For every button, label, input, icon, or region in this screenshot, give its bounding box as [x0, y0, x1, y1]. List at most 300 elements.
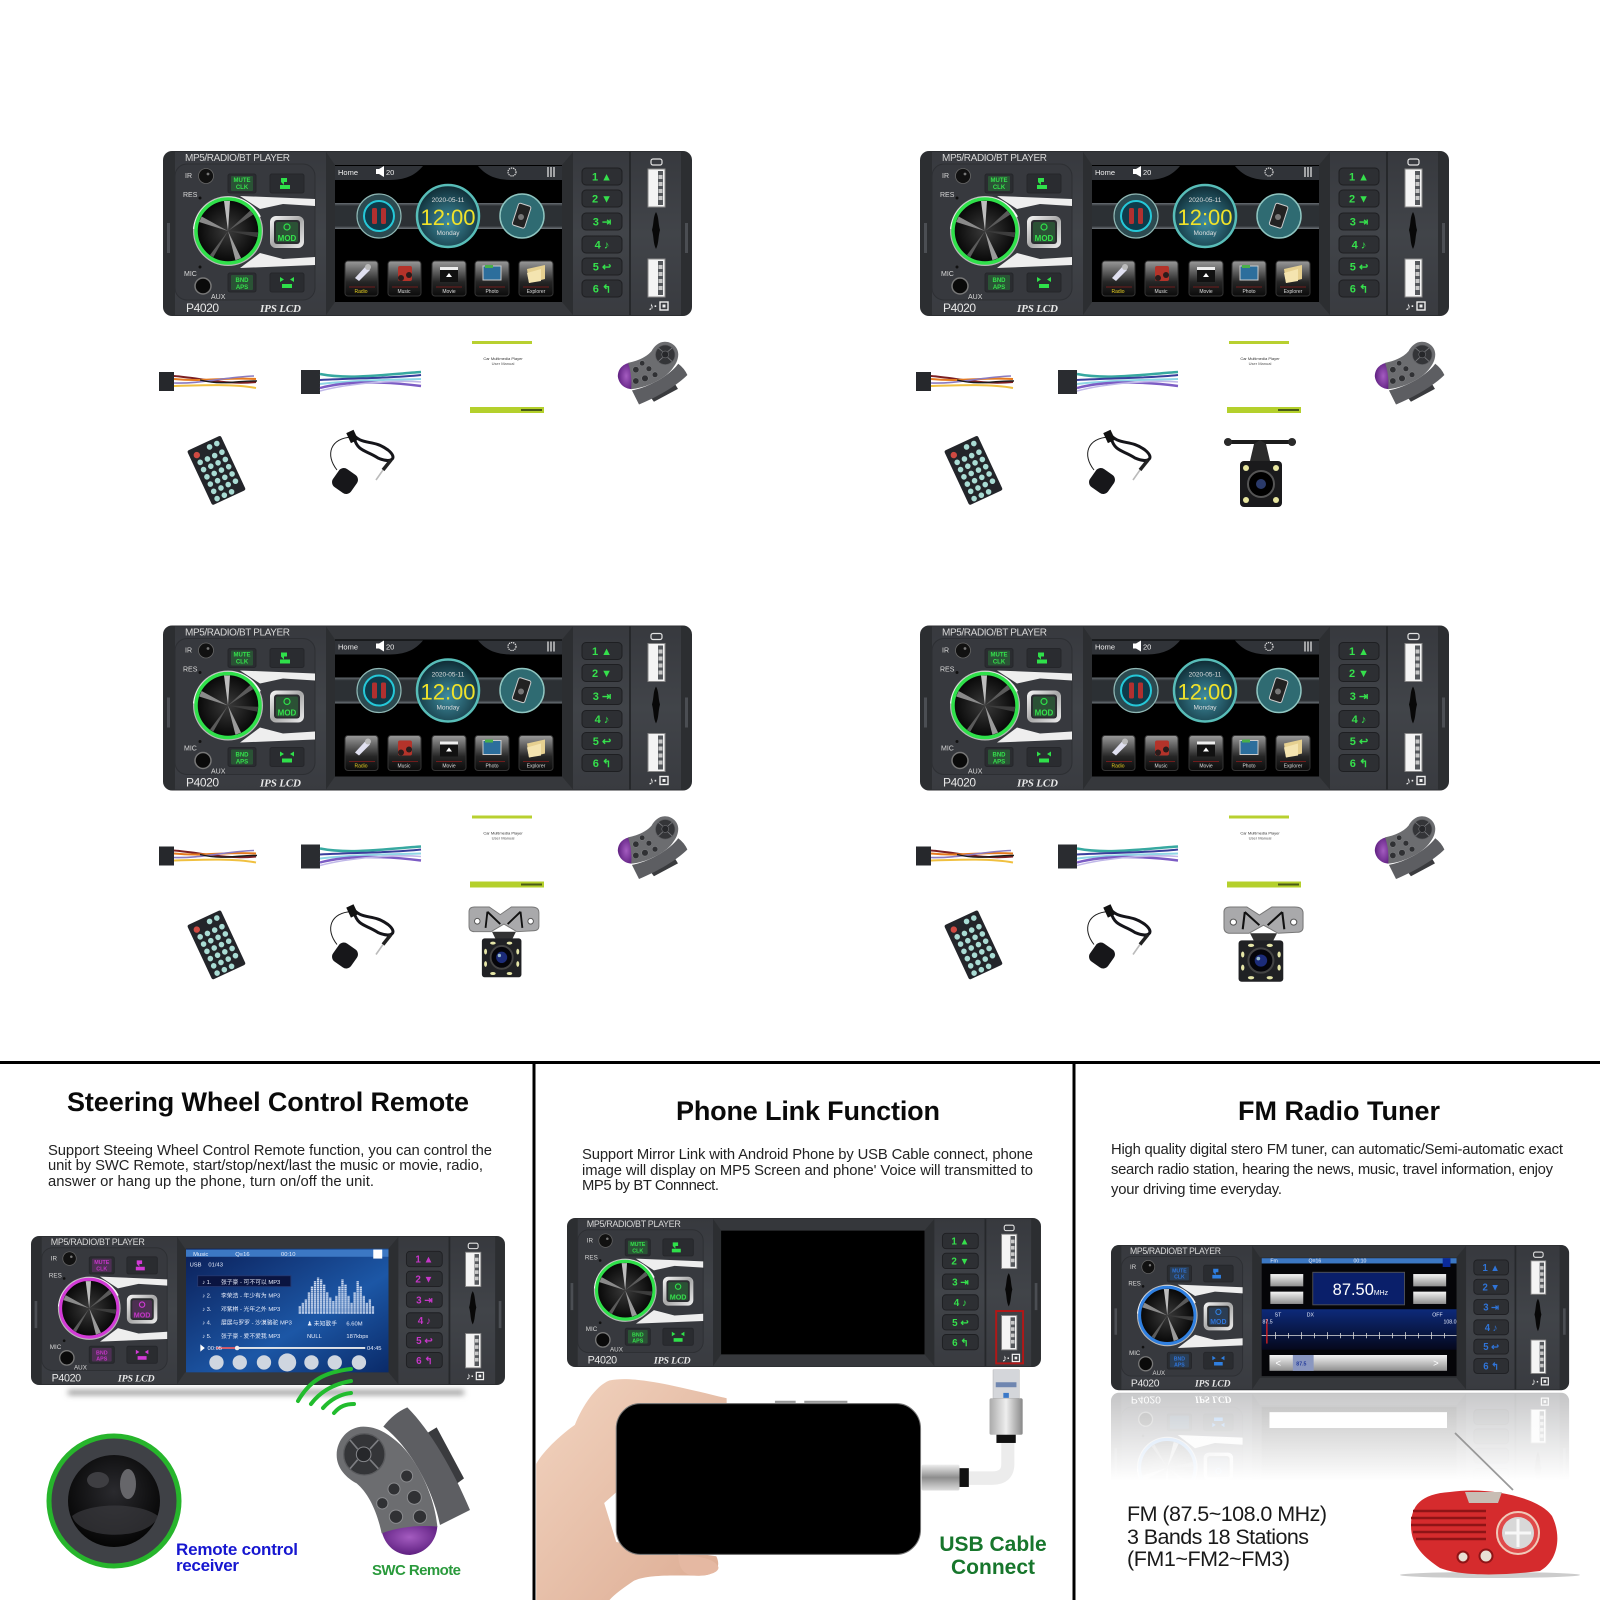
screen text: Monday	[1193, 230, 1217, 237]
buttons: APS	[993, 760, 1005, 766]
screen text: Home	[338, 642, 358, 652]
screen text: Radio	[354, 289, 368, 295]
icon: red retro radio	[1400, 1433, 1580, 1578]
music screen: 00:10	[281, 1252, 296, 1258]
music screen: ♪ 5.	[202, 1334, 212, 1340]
music screen: 01/43	[208, 1263, 223, 1269]
music screen: Q≡16	[235, 1252, 250, 1258]
unit labels: MIC	[184, 746, 197, 752]
screen text: Radio	[354, 764, 368, 770]
music screen	[186, 1249, 389, 1372]
head unit, purple backlight with music screen	[31, 1236, 505, 1385]
screen text: 12:00	[1177, 205, 1233, 230]
user manual: Car Multimedia Player	[483, 356, 523, 361]
blank screen	[721, 1231, 925, 1354]
screen text: 2020-05-11	[1189, 672, 1222, 678]
FM band specification: FM (87.5~108.0 MHz)	[1127, 1502, 1327, 1526]
panel: package option 1	[159, 151, 692, 505]
unit labels: MP5/RADIO/BT PLAYER	[942, 153, 1047, 164]
heading: FM Radio Tuner	[1238, 1096, 1440, 1126]
unit labels: AUX	[968, 294, 983, 301]
buttons: 1 ▲	[1349, 646, 1369, 658]
buttons: BND	[1174, 1356, 1185, 1362]
unit labels: IR	[1130, 1264, 1137, 1271]
unit labels: RES	[940, 666, 955, 674]
description: Support Steeing Wheel Control Remote function, you can control the	[48, 1143, 492, 1159]
unit labels: MP5/RADIO/BT PLAYER	[185, 153, 290, 164]
unit labels: RES	[49, 1273, 62, 1280]
screen text: Radio	[1111, 289, 1125, 295]
screen text: Movie	[442, 289, 456, 295]
unit labels: P4020	[186, 301, 219, 315]
unit labels: IPS LCD	[1016, 303, 1058, 315]
FM screen	[1262, 1258, 1457, 1376]
buttons: 1 ▲	[592, 646, 612, 658]
head unit reflection: IPS LCD	[1194, 1393, 1231, 1404]
FM screen: 87.5	[1296, 1362, 1306, 1368]
user manual: Car Multimedia Player	[1240, 830, 1280, 836]
description	[582, 1147, 1033, 1194]
screen text: Music	[1154, 764, 1168, 770]
buttons: ♪·	[466, 1372, 474, 1383]
music screen: NULL	[307, 1334, 323, 1340]
unit labels: P4020	[588, 1354, 617, 1366]
description: search radio station, hearing the news, music, travel information, enjoy	[1111, 1162, 1554, 1178]
music screen: 张子豪 - 可不可以 MP3	[221, 1278, 280, 1286]
IR remote	[187, 435, 246, 505]
GPS / mic accessory	[1087, 904, 1150, 971]
buttons: CLK	[1174, 1274, 1185, 1280]
head unit, green backlight with blank screen	[567, 1218, 1041, 1367]
screen text: 12:00	[1177, 680, 1233, 704]
buttons: 6 ↰	[593, 284, 611, 296]
steering wheel remote	[618, 816, 687, 879]
buttons: BND	[236, 278, 249, 284]
buttons: BND	[992, 752, 1006, 758]
music screen: USB	[190, 1263, 202, 1269]
USB highlight box	[996, 1311, 1023, 1363]
unit labels: AUX	[610, 1347, 624, 1354]
screen text: Movie	[1199, 764, 1213, 770]
buttons: ♪·	[1405, 776, 1415, 788]
unit labels: P4020	[52, 1372, 81, 1384]
screen text: Monday	[436, 230, 460, 237]
unit labels: AUX	[1153, 1370, 1165, 1377]
buttons: APS	[632, 1339, 644, 1345]
buttons: 3 ⇥	[1483, 1302, 1500, 1314]
screen text: Explorer	[1284, 764, 1303, 770]
description	[1111, 1142, 1563, 1198]
buttons	[630, 1237, 1010, 1365]
screen text: 12:00	[420, 205, 476, 230]
buttons: MOD	[278, 234, 297, 243]
buttons: CLK	[993, 660, 1006, 666]
hand holding phone	[536, 1379, 921, 1600]
screen text: 2020-05-11	[432, 672, 465, 678]
buttons: 1 ▲	[415, 1255, 433, 1266]
buttons: 4 ♪	[1352, 714, 1366, 726]
heading: Steering Wheel Control Remote	[67, 1087, 469, 1117]
music screen: ♪ 3.	[202, 1307, 212, 1313]
unit labels: IR	[185, 173, 192, 180]
buttons: BND	[992, 278, 1006, 284]
music screen: 展展与罗罗 - 沙漠骆驼 MP3	[221, 1318, 292, 1327]
GPS / mic accessory	[330, 904, 393, 971]
description: your driving time everyday.	[1111, 1182, 1282, 1198]
FM screen: 87.50MHz	[1333, 1280, 1389, 1299]
unit labels	[183, 628, 301, 790]
buttons: 2 ▼	[592, 194, 612, 206]
rear camera, 12 LED	[469, 907, 539, 977]
unit labels: IPS LCD	[1016, 778, 1058, 790]
buttons: CLK	[632, 1248, 643, 1254]
screen text: 20	[1143, 168, 1151, 177]
unit labels: MIC	[184, 271, 197, 278]
music screen: ♪ 4.	[202, 1320, 212, 1327]
buttons: 5 ↩	[1350, 262, 1368, 274]
FM band specification: (FM1~FM2~FM3)	[1127, 1547, 1290, 1571]
buttons: 3 ⇥	[952, 1277, 969, 1288]
receiver label	[176, 1540, 298, 1575]
buttons: MOD	[278, 708, 297, 718]
unit labels	[1128, 1246, 1231, 1390]
buttons: APS	[1174, 1362, 1185, 1368]
unit labels: IR	[587, 1237, 593, 1244]
screen text: Photo	[1242, 289, 1256, 295]
screen text: 20	[386, 642, 394, 652]
user manual: User Manual	[492, 836, 514, 840]
screen text	[338, 642, 546, 770]
unit labels: RES	[585, 1255, 598, 1262]
buttons: ♪·	[648, 776, 658, 788]
unit labels: IPS LCD	[259, 303, 301, 315]
steering wheel remote	[1375, 342, 1444, 405]
buttons: MUTE	[94, 1260, 110, 1266]
music screen: 李荣浩 - 年少有为 MP3	[221, 1291, 280, 1299]
buttons	[234, 172, 658, 313]
panel: package option 3	[159, 626, 692, 980]
buttons: CLK	[96, 1266, 107, 1272]
description: MP5 by BT Connnect.	[582, 1178, 719, 1194]
buttons: BND	[632, 1332, 644, 1338]
buttons: 4 ♪	[418, 1316, 431, 1327]
screen text	[1095, 642, 1303, 770]
description: unit by SWC Remote, start/stop/next/last the music or movie, radio,	[48, 1158, 483, 1174]
unit labels	[940, 628, 1058, 790]
unit labels: AUX	[74, 1365, 88, 1372]
GPS / mic accessory	[1087, 430, 1150, 496]
unit labels: IPS LCD	[259, 778, 301, 790]
power harness	[159, 846, 257, 866]
buttons: 1 ▲	[951, 1237, 969, 1248]
music screen: 187kbps	[346, 1334, 368, 1340]
buttons: 3 ⇥	[593, 691, 611, 703]
unit labels: P4020	[186, 776, 219, 790]
buttons: BND	[236, 752, 249, 758]
description: image will display on MP5 Screen and phone' Voice will transmitted to	[582, 1163, 1033, 1179]
music screen: 邓紫棋 - 光年之外 MP3	[221, 1305, 280, 1313]
music screen: 张子豪 - 爱不爱我 MP3	[221, 1332, 280, 1340]
steering wheel remote large	[337, 1407, 470, 1555]
receiver label: receiver	[176, 1556, 239, 1575]
buttons: 3 ⇥	[1350, 691, 1368, 703]
receiver label: Remote control	[176, 1540, 298, 1559]
buttons: APS	[236, 285, 248, 291]
steering wheel remote	[618, 342, 687, 405]
screen text: Home	[1095, 642, 1115, 652]
screen text: Music	[1154, 289, 1168, 295]
unit labels: IR	[942, 648, 949, 654]
panel: phone link function	[536, 1096, 1047, 1600]
screen text: Monday	[436, 704, 460, 712]
head unit P4020	[163, 626, 692, 790]
screen text: 20	[386, 168, 394, 177]
screen text: Music	[397, 764, 411, 770]
unit labels	[940, 153, 1058, 315]
buttons: ♪·	[1405, 301, 1415, 313]
screen text	[338, 168, 546, 295]
buttons: 6 ↰	[1483, 1361, 1499, 1373]
buttons: CLK	[236, 185, 249, 191]
unit shadow	[68, 1390, 464, 1395]
FM screen: ST	[1275, 1312, 1282, 1318]
screen text: Explorer	[527, 764, 546, 770]
buttons: ♪·	[1002, 1354, 1010, 1365]
power harness	[916, 846, 1014, 866]
screen text: 2020-05-11	[1189, 197, 1222, 204]
buttons: MUTE	[234, 178, 250, 184]
speaker harness	[301, 844, 421, 868]
buttons: 6 ↰	[1350, 758, 1368, 770]
heading: Phone Link Function	[676, 1096, 940, 1126]
user manual	[1227, 341, 1301, 413]
screen text	[1095, 168, 1303, 295]
screen text: Photo	[485, 289, 499, 295]
buttons: 5 ↩	[1483, 1342, 1499, 1353]
buttons: 6 ↰	[593, 758, 611, 770]
FM screen: <	[1276, 1358, 1281, 1369]
unit labels	[585, 1219, 691, 1366]
unit labels: IPS LCD	[117, 1373, 155, 1384]
buttons: APS	[236, 760, 248, 766]
unit labels: RES	[183, 666, 198, 674]
SWC label: SWC Remote	[372, 1562, 461, 1579]
music screen: ♪ 2.	[202, 1293, 212, 1299]
buttons: MOD	[1035, 234, 1054, 243]
FM screen: 108.0	[1444, 1319, 1457, 1325]
screen text: Home	[338, 168, 358, 177]
FM screen: OFF	[1432, 1312, 1443, 1318]
unit labels: AUX	[211, 768, 226, 776]
head unit reflection	[1105, 1393, 1575, 1542]
buttons: CLK	[993, 185, 1006, 191]
unit labels: RES	[940, 192, 955, 199]
unit labels	[49, 1237, 155, 1384]
unit labels: MIC	[1129, 1350, 1141, 1357]
buttons: MOD	[1210, 1319, 1226, 1326]
unit labels: MP5/RADIO/BT PLAYER	[185, 628, 290, 638]
buttons: 4 ♪	[1485, 1323, 1498, 1334]
buttons: 1 ▲	[1349, 172, 1369, 184]
buttons: MOD	[1035, 708, 1054, 718]
buttons: 2 ▼	[1349, 668, 1369, 680]
buttons: CLK	[236, 660, 249, 666]
remote control receiver close-up	[49, 1436, 179, 1566]
unit labels: IR	[51, 1255, 57, 1262]
buttons: MUTE	[1172, 1268, 1187, 1274]
unit labels: IR	[942, 173, 949, 180]
buttons: APS	[993, 285, 1005, 291]
buttons: 3 ⇥	[1350, 216, 1368, 228]
USB cable label: USB Cable	[939, 1533, 1047, 1556]
panel: package option 4	[916, 626, 1449, 982]
user manual: Car Multimedia Player	[483, 830, 523, 836]
buttons	[94, 1255, 474, 1383]
user manual: Car Multimedia Player	[1240, 356, 1280, 361]
buttons: 2 ▼	[415, 1274, 433, 1286]
music screen: 04:45	[367, 1346, 382, 1352]
screen text: Monday	[1193, 704, 1217, 712]
panel borders	[0, 1062, 1600, 1600]
unit labels: MIC	[941, 746, 954, 752]
user manual	[470, 341, 544, 413]
unit labels: IR	[185, 648, 192, 654]
buttons	[234, 646, 658, 788]
buttons: ♪·	[648, 301, 658, 313]
power harness	[916, 372, 1014, 391]
buttons: ♪·	[1531, 1377, 1539, 1388]
buttons	[990, 172, 1415, 313]
buttons: MOD	[670, 1292, 686, 1301]
speaker harness	[301, 370, 421, 394]
screen text: Photo	[485, 764, 499, 770]
USB cable label: Connect	[951, 1556, 1035, 1579]
buttons: 6 ↰	[1350, 284, 1368, 296]
buttons	[1172, 1263, 1539, 1388]
buttons: APS	[96, 1357, 108, 1363]
unit labels: RES	[1128, 1280, 1141, 1287]
screen text: Explorer	[1284, 289, 1303, 295]
FM band specification	[1127, 1502, 1327, 1571]
rear camera, 4 LED	[1224, 438, 1296, 507]
buttons: MUTE	[990, 652, 1008, 658]
buttons: 2 ▼	[951, 1256, 969, 1268]
unit labels: AUX	[968, 768, 983, 776]
buttons: 4 ♪	[954, 1298, 967, 1309]
FM screen: 87.5	[1263, 1319, 1273, 1325]
buttons: 1 ▲	[592, 172, 612, 184]
steering wheel remote	[1375, 816, 1444, 879]
unit labels: P4020	[943, 776, 976, 790]
buttons: 6 ↰	[952, 1338, 969, 1349]
USB cable	[922, 1370, 1023, 1491]
screen text: 20	[1143, 642, 1151, 652]
IR remote	[944, 910, 1003, 980]
FM screen: Fm	[1270, 1259, 1278, 1265]
FM screen: 00:10	[1353, 1259, 1367, 1265]
speaker harness	[1058, 370, 1178, 394]
buttons: 5 ↩	[1350, 736, 1368, 748]
user manual	[470, 816, 544, 888]
buttons: 6 ↰	[416, 1356, 433, 1367]
buttons: 5 ↩	[593, 262, 611, 274]
FM screen: Q≡16	[1308, 1259, 1321, 1265]
buttons: 2 ▼	[592, 668, 612, 680]
unit labels: MP5/RADIO/BT PLAYER	[942, 628, 1047, 638]
FM screen: >	[1433, 1358, 1439, 1369]
buttons: 4 ♪	[595, 714, 609, 726]
music screen: ♪ 1.	[202, 1280, 212, 1286]
unit labels: MIC	[50, 1344, 62, 1351]
unit labels: P4020	[1131, 1379, 1160, 1390]
screen text: Radio	[1111, 764, 1125, 770]
buttons: 5 ↩	[416, 1336, 433, 1347]
buttons: 3 ⇥	[416, 1295, 433, 1306]
USB cable label	[939, 1533, 1047, 1579]
unit labels: IPS LCD	[1194, 1379, 1231, 1390]
description: Support Mirror Link with Android Phone by USB Cable connect, phone	[582, 1147, 1033, 1163]
music screen: Music	[193, 1252, 208, 1258]
buttons: MUTE	[234, 652, 250, 658]
unit labels: RES	[183, 192, 198, 199]
head unit P4020	[920, 626, 1449, 790]
power harness	[159, 372, 257, 391]
FM band specification: 3 Bands 18 Stations	[1127, 1525, 1309, 1549]
buttons: 2 ▼	[1349, 194, 1369, 206]
buttons: 5 ↩	[593, 736, 611, 748]
unit labels: MIC	[941, 271, 954, 278]
head unit P4020	[920, 151, 1449, 316]
speaker harness	[1058, 844, 1178, 868]
screen text: Photo	[1242, 764, 1256, 770]
IR remote	[187, 910, 246, 980]
description: answer or hang up the phone, turn on/off the unit.	[48, 1174, 374, 1190]
buttons: 5 ↩	[952, 1318, 969, 1329]
user manual	[1227, 816, 1301, 888]
GPS / mic accessory	[330, 430, 393, 496]
buttons: BND	[96, 1350, 108, 1356]
user manual: User Manual	[492, 361, 514, 366]
buttons: MUTE	[630, 1242, 646, 1248]
head unit P4020	[163, 151, 692, 316]
user manual: User Manual	[1249, 836, 1271, 840]
buttons: 4 ♪	[1352, 240, 1366, 252]
buttons: 2 ▼	[1482, 1282, 1500, 1293]
description: High quality digital stero FM tuner, can automatic/Semi-automatic exact	[1111, 1142, 1563, 1158]
buttons: MUTE	[990, 178, 1008, 184]
head unit reflection: P4020	[1131, 1393, 1161, 1404]
panel: steering wheel control remote	[31, 1087, 505, 1579]
FM screen: DX	[1307, 1312, 1314, 1318]
icon: wireless signal arcs	[298, 1369, 354, 1413]
description	[48, 1143, 492, 1190]
screen text: Movie	[1199, 289, 1213, 295]
buttons: 3 ⇥	[593, 216, 611, 228]
screen text: 12:00	[420, 680, 476, 704]
screen text: 2020-05-11	[432, 197, 465, 204]
unit labels	[183, 153, 301, 315]
unit labels: MP5/RADIO/BT PLAYER	[51, 1237, 145, 1247]
unit labels: P4020	[943, 301, 976, 315]
panel: package option 2	[916, 151, 1449, 507]
unit labels: IPS LCD	[653, 1355, 691, 1366]
music screen: ♟ 未知歌手	[307, 1319, 337, 1327]
buttons: 1 ▲	[1482, 1263, 1500, 1274]
screen text: Music	[397, 289, 411, 295]
user manual: User Manual	[1249, 361, 1271, 366]
music screen: 00:05	[208, 1346, 222, 1352]
IR remote	[944, 435, 1003, 505]
